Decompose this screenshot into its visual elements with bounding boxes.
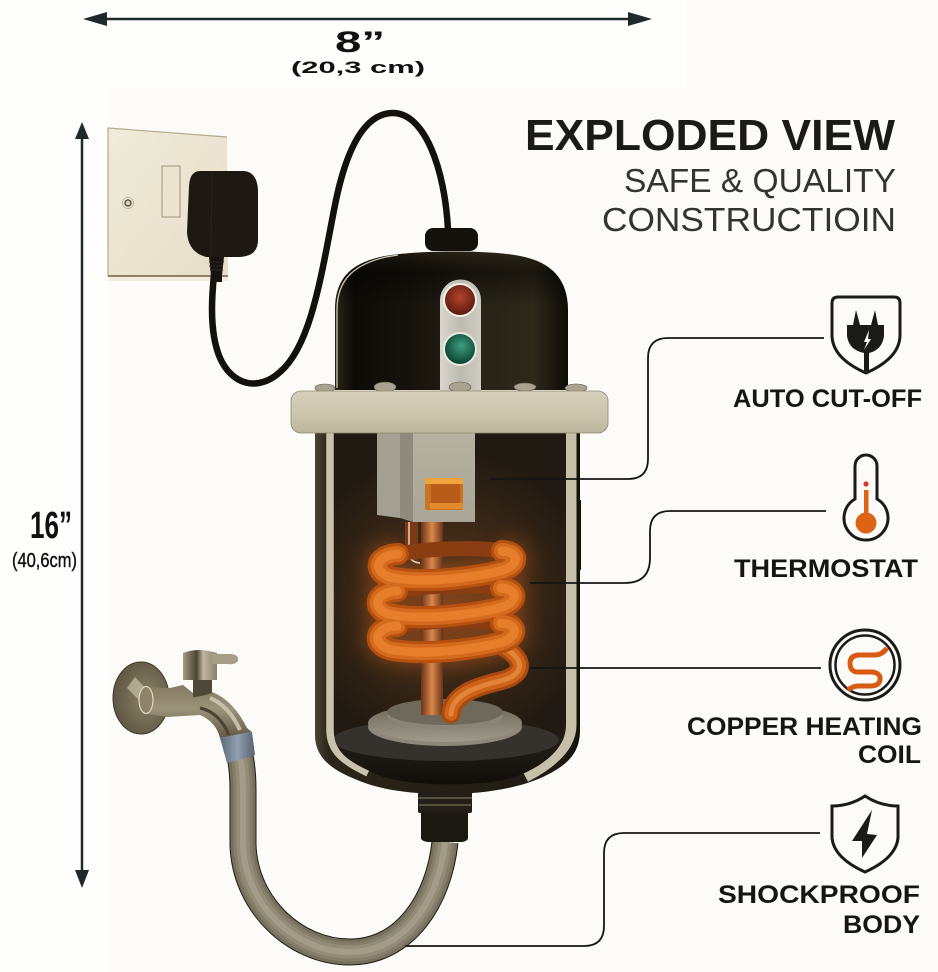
height dimension: arrow and label: [12, 122, 89, 888]
indicator lights panel: [440, 280, 481, 391]
height dimension: arrow and label: 16”: [30, 505, 72, 547]
flange bolts: [315, 382, 587, 392]
leader line: shockproof body: [405, 833, 820, 946]
leader line: copper heating coil: [530, 667, 821, 669]
width dimension: arrow and label: 8”: [335, 26, 385, 59]
width dimension: arrow and label: [83, 12, 652, 77]
cable grommet cap: [425, 228, 478, 251]
heater body shell: [315, 433, 581, 794]
thermostat box with orange switch: [377, 433, 475, 522]
icon: thermometer: [844, 455, 888, 540]
icon: copper heating coil: [830, 630, 900, 700]
title block: [525, 111, 896, 238]
title block: SAFE & QUALITY: [624, 162, 896, 199]
top dome: [335, 252, 568, 390]
title block: EXPLODED VIEW: [525, 111, 895, 160]
wall tap: [113, 650, 255, 763]
label: shockproof body: [718, 881, 920, 939]
icon: auto cut-off plug shield: [832, 297, 900, 373]
bottom threaded connector: [418, 792, 472, 842]
heating element: stem and copper coil: [378, 522, 519, 715]
height dimension: arrow and label: (40,6cm): [12, 550, 77, 572]
power cable: [212, 113, 448, 383]
label: auto cut-off: AUTO CUT-OFF: [733, 385, 922, 413]
label: shockproof body: BODY: [843, 911, 920, 939]
hose: [238, 748, 445, 952]
flange ring: [291, 391, 608, 433]
width dimension: arrow and label: (20,3 cm): [291, 58, 425, 77]
label: copper heating coil: COIL: [858, 741, 921, 769]
plug: [187, 171, 258, 282]
icon: shockproof shield: [832, 796, 898, 872]
label: shockproof body: SHOCKPROOF: [718, 881, 920, 909]
leader line: thermostat: [530, 511, 826, 583]
body interior cutaway: [333, 433, 566, 798]
title block: CONSTRUCTIOIN: [602, 201, 896, 238]
wall socket plate: [108, 128, 228, 281]
label: copper heating coil: COPPER HEATING: [687, 713, 922, 741]
label: copper heating coil: [687, 713, 922, 769]
leader line: auto cut-off: [490, 338, 824, 479]
label: thermostat: THERMOSTAT: [734, 555, 918, 583]
base plate discs: [368, 699, 522, 746]
